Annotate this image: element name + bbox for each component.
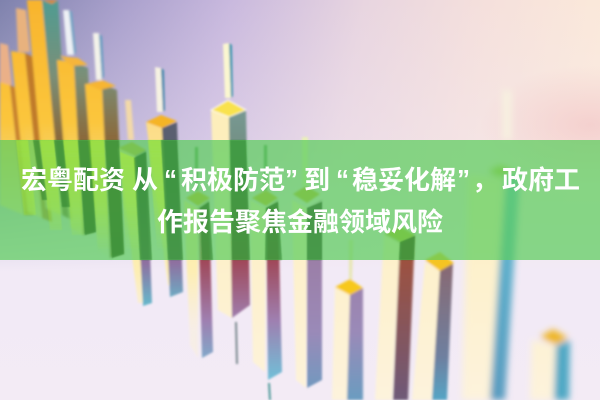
title line 1: 政府工 xyxy=(502,160,580,197)
dark bar sides inside band xyxy=(33,140,415,260)
title line 1 xyxy=(21,160,580,197)
bars: far right blurred xyxy=(462,90,570,400)
title line 2: 作报告聚焦金融领域风险 xyxy=(157,202,443,239)
bars: left cluster xyxy=(0,0,134,258)
title line 1: ” xyxy=(457,164,470,194)
title line 1: 宏粤配资 xyxy=(21,160,125,197)
title line 1: “ xyxy=(336,164,349,194)
title line 1: “ xyxy=(164,164,177,194)
title line 1: 积极防范 xyxy=(181,160,285,197)
lime bar fronts inside band xyxy=(16,140,168,258)
title line 1: 从 xyxy=(132,160,158,197)
title line 1: ” xyxy=(285,164,298,194)
green title band xyxy=(0,140,600,260)
bars: middle cluster xyxy=(118,43,322,400)
title line 1: 到 xyxy=(304,160,330,197)
bars: right cluster xyxy=(332,226,454,400)
title line 1: 稳妥化解 xyxy=(352,160,456,197)
title line 1: ， xyxy=(472,160,498,197)
